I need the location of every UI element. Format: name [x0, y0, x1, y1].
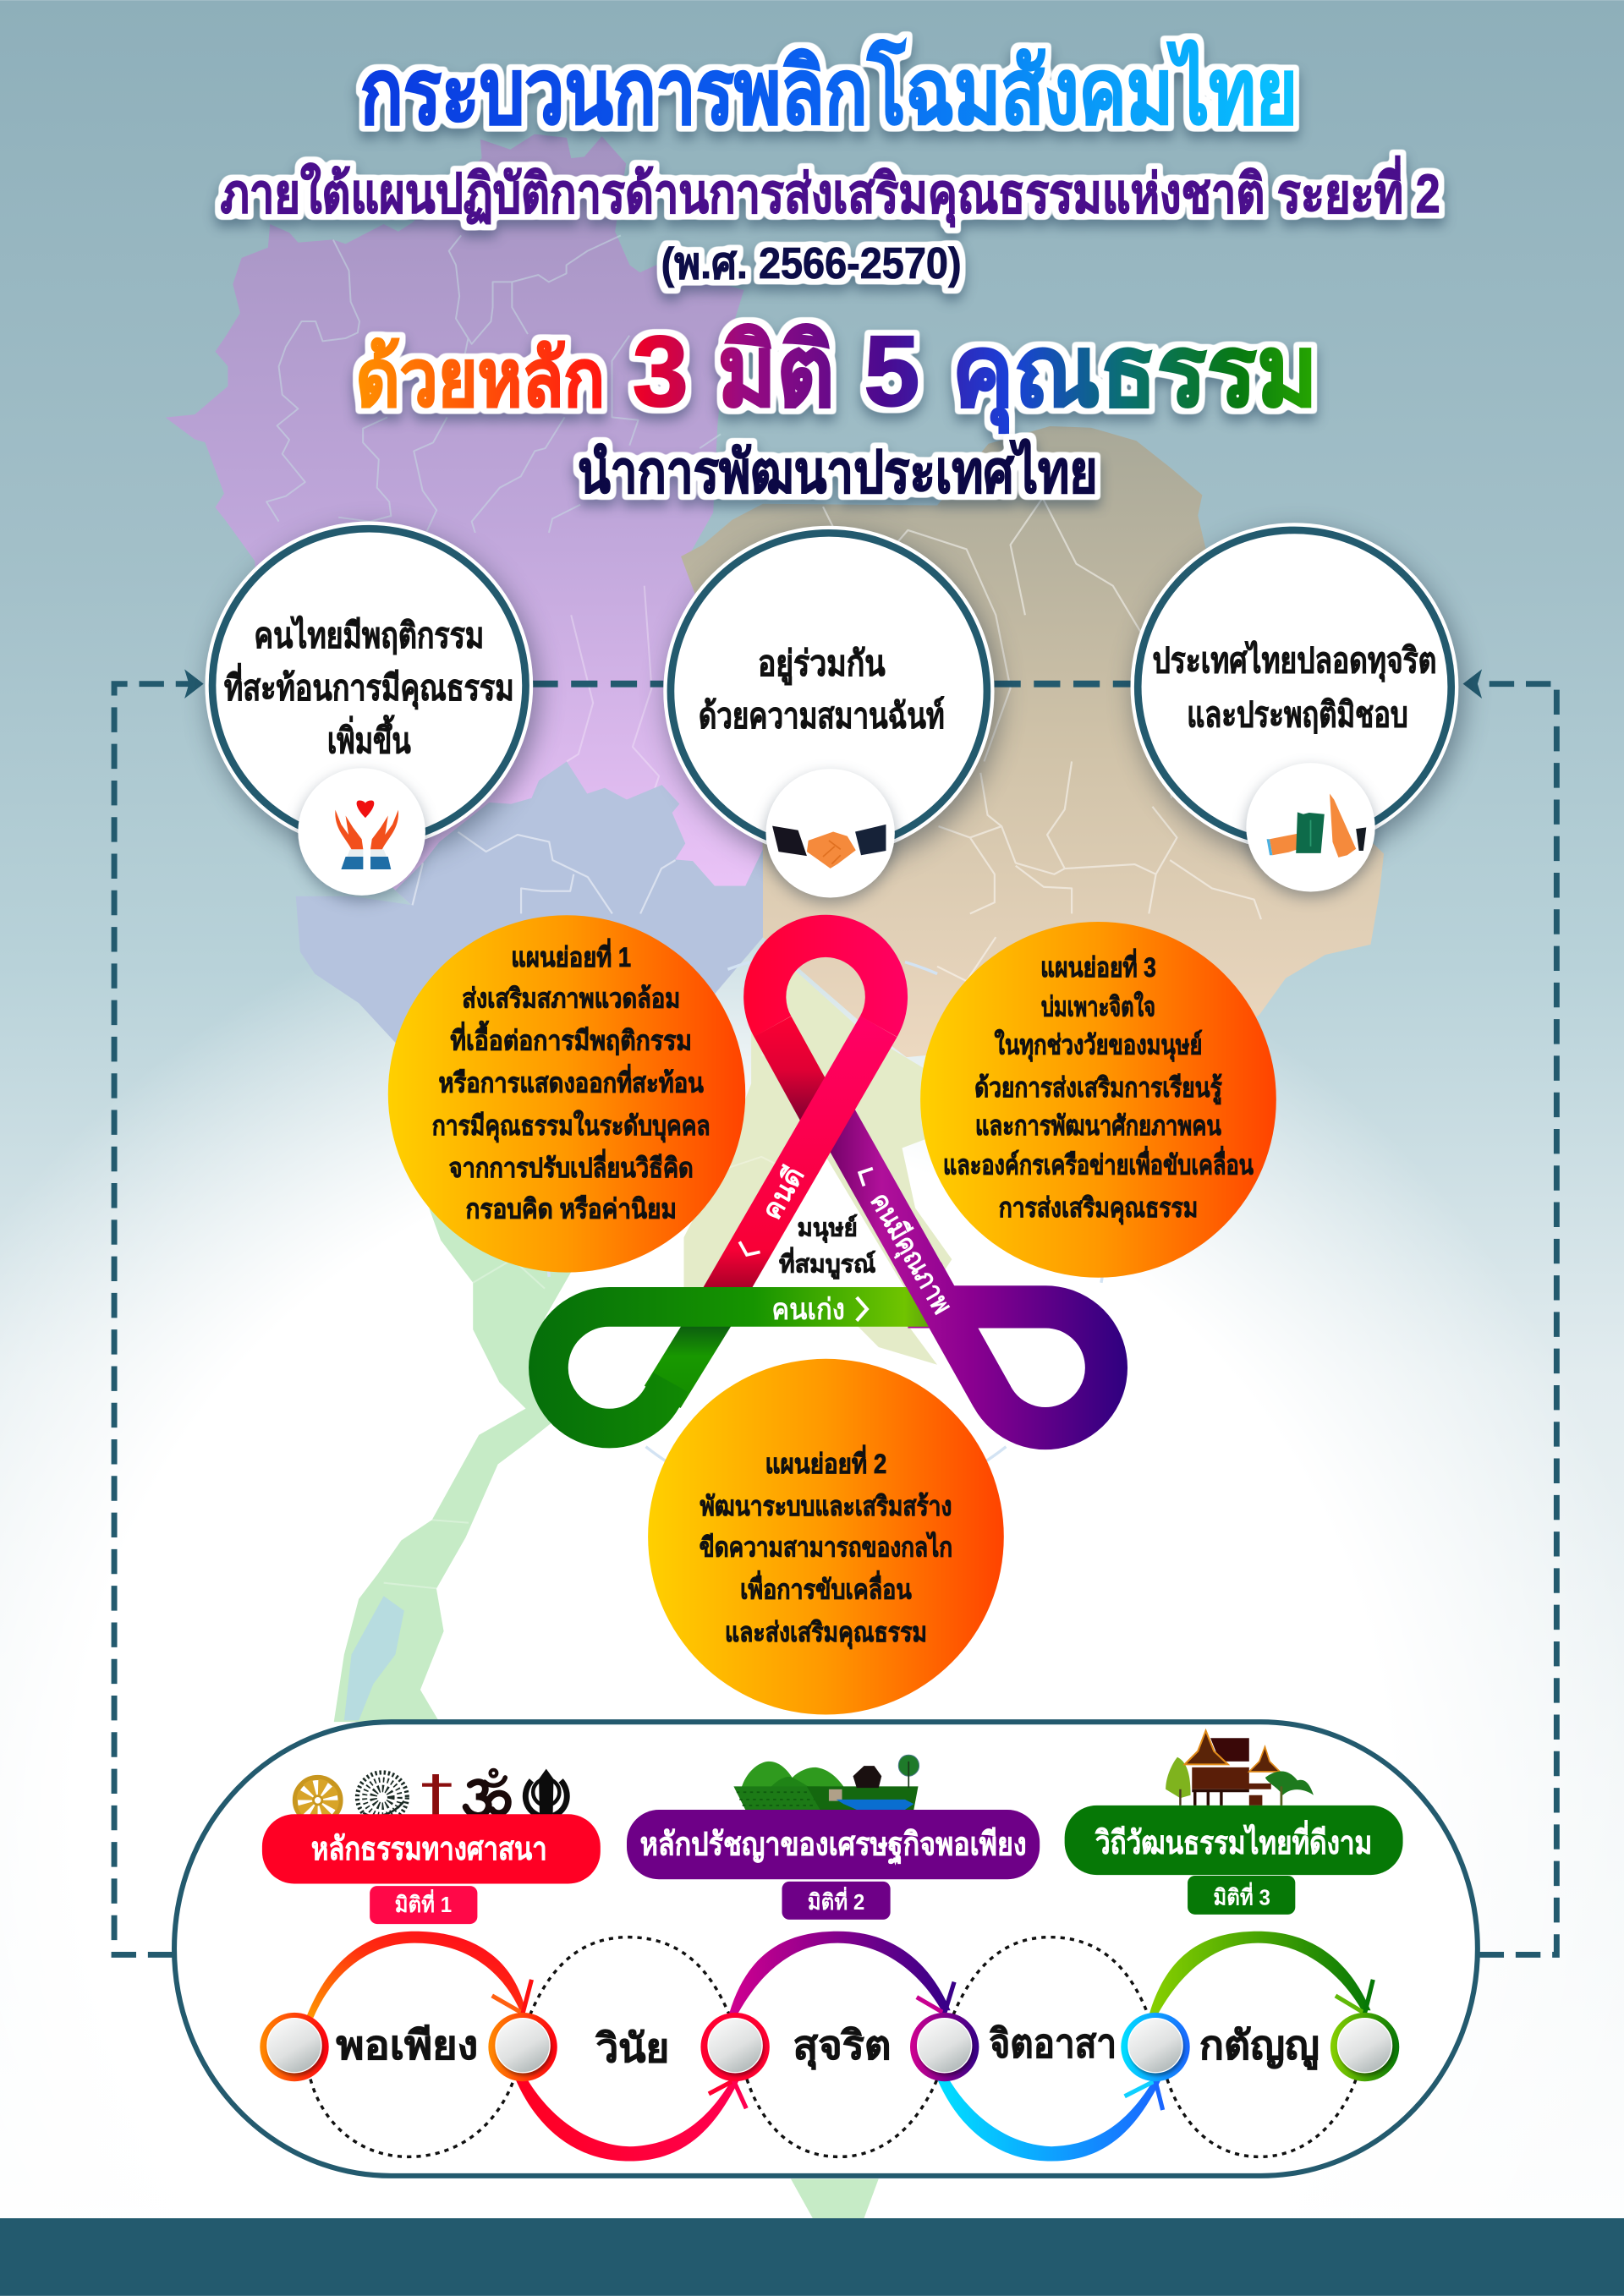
sub-plan 3 text: และการพัฒนาศักยภาพคน [975, 1110, 1221, 1141]
virtue labels: พอเพียง [336, 2023, 478, 2067]
virtue arc 4 [937, 2080, 1161, 2162]
virtue labels: จิตอาสา [989, 2022, 1116, 2066]
sub-plan 1 text: จากการปรับเปลี่ยนวิธีคิด [449, 1148, 694, 1183]
pale circle fragments behind ribbon [547, 962, 1106, 1464]
sub-plan circle 3 [920, 922, 1276, 1278]
virtue labels: สุจริต [793, 2023, 891, 2069]
headline: 3 dimensions 5 virtues: ด้วยหลัก [356, 334, 605, 423]
icon: refusing a bribe [1246, 763, 1375, 892]
headline: 3 dimensions 5 virtues: 3 [633, 315, 689, 427]
pill: sufficiency economy: หลักปรัชญาของเศรษฐกิจพอเพียง [640, 1827, 1027, 1866]
outcome 1 text: ที่สะท้อนการมีคุณธรรม [224, 663, 514, 710]
ribbon label: good person: คนดี [755, 1161, 810, 1225]
sub-plan 2 text: แผนย่อยที่ 2 [765, 1444, 886, 1479]
sub-plan 3 text: บ่มเพาะจิตใจ [1041, 991, 1155, 1022]
sub-plan 1 text: กรอบคิด หรือค่านิยม [466, 1194, 677, 1225]
outcome 2 text [699, 643, 945, 736]
icon: hands holding heart [298, 768, 425, 896]
arrow: right connector head [1463, 669, 1482, 699]
arrowheads [492, 1980, 1373, 2110]
virtue nodes [260, 2013, 1399, 2081]
centre label: the complete human: ที่สมบูรณ์ [779, 1247, 875, 1280]
sub-plan circle 2 [648, 1359, 1004, 1715]
sub-plan 2 text [700, 1444, 952, 1650]
sub-plan 2 text: ขีดความสามารถของกลไก [700, 1532, 952, 1563]
ribbon label: good person [739, 1161, 810, 1255]
map: western region [296, 761, 763, 1127]
virtue labels: วินัย [595, 2026, 669, 2070]
outcome 1 text: คนไทยมีพฤติกรรม [254, 614, 484, 655]
map: central region [684, 967, 952, 1365]
pill: sufficiency economy [627, 1810, 1040, 1879]
tab: dimension 3 [1188, 1876, 1295, 1915]
outcome 3 text: และประพฤติมิชอบ [1187, 694, 1408, 734]
icon: cross [421, 1773, 453, 1822]
tab: dimension 2 [782, 1882, 891, 1920]
outcome 3 text [1153, 639, 1436, 734]
icon: rural sufficiency scene [733, 1755, 919, 1810]
sub-plan 3 text [943, 948, 1254, 1225]
sub-plan 3 text: ในทุกช่วงวัยของมนุษย์ [995, 1029, 1202, 1063]
ribbon: three-loop human symbol [548, 936, 1106, 1428]
outcome 2 text: อยู่ร่วมกัน [758, 643, 886, 685]
virtue arc 2 [515, 2080, 739, 2162]
virtue labels [336, 2022, 1320, 2070]
icon: handshake [765, 769, 895, 897]
headline: 3 dimensions 5 virtues: มิติ [717, 315, 835, 427]
virtue arc 5 [1149, 1932, 1370, 2014]
tab: dimension 2: มิติที่ 2 [808, 1886, 864, 1915]
sub-plan 2 text: พัฒนาระบบและเสริมสร้าง [700, 1491, 952, 1521]
sub-plan 1 text: หรือการแสดงออกที่สะท้อน [439, 1064, 704, 1099]
ribbon centre triangle [751, 1157, 905, 1289]
map: southern region [334, 1208, 879, 2218]
icon: om [466, 1772, 508, 1816]
pill: religious principles [262, 1814, 601, 1883]
headline: 3 dimensions 5 virtues: คุณธรรม [952, 315, 1318, 434]
arrow: left connector head [184, 669, 204, 699]
outcome 1 text: เพิ่มขึ้น [327, 715, 411, 760]
ribbon label: capable person: คนเก่ง [771, 1294, 845, 1326]
sub-plan 1 text: การมีคุณธรรมในระดับบุคคล [432, 1110, 710, 1143]
icon: islamic calligraphy [352, 1767, 412, 1827]
footer band [0, 2218, 1624, 2296]
icon: dharma wheel [289, 1772, 346, 1829]
sub-plan 1 text: ส่งเสริมสภาพแวดล้อม [462, 983, 680, 1013]
subtitle: นำการพัฒนาประเทศไทย [578, 438, 1098, 505]
outcome circle 2 [663, 526, 995, 897]
headline: 3 dimensions 5 virtues: 5 [864, 315, 919, 427]
sub-plan 1 text: แผนย่อยที่ 1 [511, 938, 631, 973]
headline: 3 dimensions 5 virtues [356, 315, 1318, 434]
outcome circle 3 [1131, 523, 1458, 892]
virtue arc 1 [306, 1932, 526, 2018]
tab: dimension 1: มิติที่ 1 [395, 1888, 452, 1917]
sub-plan 2 text: และส่งเสริมคุณธรรม [725, 1617, 927, 1650]
sub-plan 3 text: แผนย่อยที่ 3 [1040, 948, 1156, 983]
virtue labels: กตัญญู [1199, 2023, 1320, 2069]
outcome 1 text [224, 614, 514, 760]
dashed connector lines [114, 684, 1556, 1954]
ribbon label: quality person: คนมีคุณภาพ [862, 1186, 959, 1320]
sub-plan 1 text [432, 938, 710, 1225]
sub-plan 3 text: และองค์กรเครือข่ายเพื่อขับเคลื่อน [943, 1146, 1254, 1181]
outcome circle 1 [205, 522, 533, 896]
virtue arc 3 [729, 1932, 951, 2014]
sub-plan 3 text: ด้วยการส่งเสริมการเรียนรู้ [974, 1072, 1222, 1105]
outcome 2 text: ด้วยความสมานฉันท์ [699, 696, 945, 736]
dashed virtue arcs [310, 1937, 1356, 2156]
sub-plan 3 text: การส่งเสริมคุณธรรม [999, 1192, 1198, 1225]
sub-plan 2 text: เพื่อการขับเคลื่อน [740, 1570, 912, 1605]
icon: khanda [525, 1769, 567, 1822]
icon: thai house [1166, 1731, 1314, 1806]
tab: dimension 1 [370, 1886, 477, 1924]
pill: religious principles: หลักธรรมทางศาสนา [311, 1832, 547, 1867]
panel: three dimensions and five virtues [174, 1722, 1478, 2176]
map of Thailand [166, 134, 1384, 2218]
pill: thai culture [1065, 1806, 1403, 1875]
map: north-eastern region [681, 426, 1384, 1083]
title line 1: กระบวนการพลิกโฉมสังคมไทย [360, 40, 1298, 143]
centre label: the complete human: มนุษย์ [798, 1214, 858, 1242]
sub-plan 1 text: ที่เอื้อต่อการมีพฤติกรรม [450, 1021, 692, 1056]
centre label: the complete human [779, 1214, 875, 1280]
map: northern region [166, 134, 769, 905]
pill: thai culture: วิถีวัฒนธรรมไทยที่ดีงาม [1095, 1820, 1372, 1861]
tab: dimension 3: มิติที่ 3 [1213, 1882, 1270, 1910]
outcome 3 text: ประเทศไทยปลอดทุจริต [1153, 639, 1436, 682]
title line 3: years: (พ.ศ. 2566-2570) [661, 239, 962, 288]
title [221, 40, 1440, 505]
icons: religion symbols [289, 1767, 567, 1829]
sub-plan circle 1 [388, 915, 745, 1273]
